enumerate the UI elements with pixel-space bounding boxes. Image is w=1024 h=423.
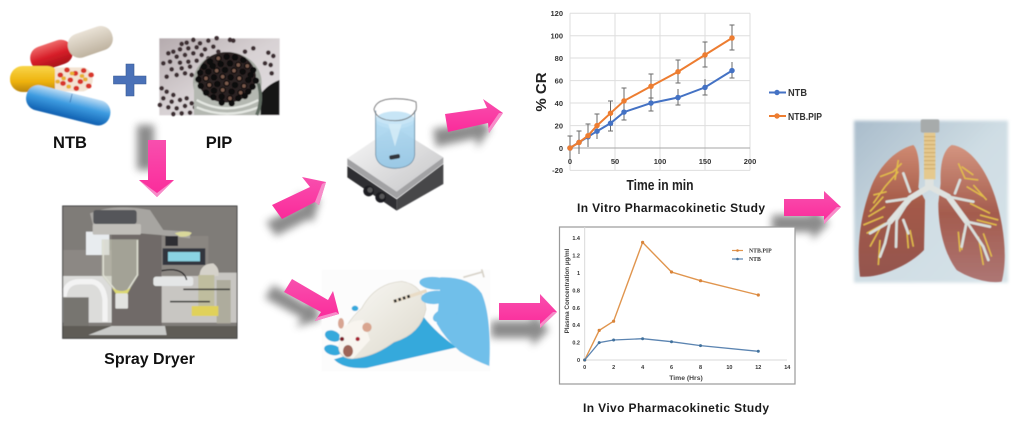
- arrow shadows: [137, 114, 829, 346]
- legend: NTB: [749, 257, 761, 263]
- mouse body: [338, 281, 426, 359]
- y axis ticks: 0.2: [572, 340, 580, 346]
- illustration: beaker on magnetic stirrer: [347, 99, 443, 211]
- yellow bronchioles: [863, 160, 998, 265]
- x axis ticks: 0: [568, 157, 572, 166]
- y axis ticks: 0: [559, 144, 563, 153]
- yellow capsule with granules: [10, 66, 93, 92]
- label: PIP: PIP: [206, 134, 232, 152]
- arrow: to in vitro chart: [445, 99, 503, 133]
- right lobe: [938, 145, 1005, 282]
- arrow: to dissolution beaker: [272, 177, 326, 219]
- blue capsule: [23, 83, 113, 128]
- x axis ticks: 200: [744, 157, 756, 166]
- y axis ticks: 60: [555, 76, 563, 86]
- series: NTB: [585, 339, 758, 360]
- white bronchi: [916, 179, 942, 187]
- caption: In Vitro Pharmacokinetic Study: In Vitro Pharmacokinetic Study: [577, 201, 765, 215]
- chart: in vivo plasma concentration versus time: [560, 227, 795, 384]
- y axis title: Plasma Concentration µg/ml: [564, 248, 571, 333]
- y axis ticks: 20: [555, 122, 563, 130]
- label: NTB: NTB: [53, 134, 87, 152]
- x axis title: Time in min: [626, 177, 694, 194]
- x axis ticks: 0: [583, 365, 586, 371]
- y axis title: % CR: [533, 72, 550, 112]
- x axis ticks: 100: [654, 157, 666, 166]
- y axis ticks: 80: [555, 54, 563, 63]
- legend: [732, 248, 772, 263]
- x axis ticks: 4: [641, 365, 645, 371]
- upper glove: [419, 276, 490, 366]
- illustration: lungs: [854, 119, 1008, 283]
- red and cream capsule: [27, 23, 116, 74]
- pink arrows: [139, 99, 841, 328]
- x axis title: Time (Hrs): [669, 375, 703, 382]
- y axis ticks: 1.2: [572, 254, 580, 260]
- series: NTB: [570, 71, 732, 148]
- photo: black pepper jar: [159, 38, 280, 115]
- syringe: [393, 269, 484, 302]
- stirrer base: [347, 127, 443, 211]
- beaker with water: [374, 99, 416, 168]
- arrow: to mouse: [284, 279, 339, 321]
- y axis ticks: 0.6: [572, 306, 580, 312]
- y axis ticks: 0.4: [572, 323, 581, 329]
- y axis ticks: -20: [552, 166, 563, 175]
- x axis ticks: 8: [699, 365, 702, 371]
- left lobe: [859, 145, 925, 277]
- y axis ticks: 40: [555, 99, 563, 108]
- axes: [585, 227, 787, 360]
- y axis ticks: 1.4: [572, 236, 581, 242]
- y axis ticks: 1: [577, 271, 580, 277]
- gridlines: [570, 13, 750, 170]
- legend: NTB.PIP: [749, 248, 772, 254]
- x axis ticks: 150: [699, 157, 711, 166]
- lower glove: [323, 306, 457, 368]
- legend: NTB.PIP: [788, 112, 822, 123]
- series: NTB.PIP: [570, 38, 732, 148]
- series: NTB.PIP: [585, 242, 758, 360]
- caption: In Vivo Pharmacokinetic Study: In Vivo Pharmacokinetic Study: [583, 401, 769, 415]
- y axis ticks: 0.8: [572, 288, 580, 294]
- y axis ticks: 120: [550, 9, 563, 18]
- trachea: [921, 119, 939, 179]
- x axis ticks: 10: [726, 365, 732, 371]
- y axis ticks: 100: [550, 32, 563, 40]
- y axis ticks: [550, 9, 563, 175]
- x axis ticks: 6: [670, 365, 673, 371]
- x axis ticks: 14: [784, 365, 791, 371]
- y axis ticks: 0: [577, 358, 580, 364]
- label: Spray Dryer: Spray Dryer: [104, 351, 195, 368]
- x axis ticks: [583, 365, 791, 371]
- arrow: to in vivo chart: [499, 294, 557, 328]
- arrow: to lungs: [784, 191, 841, 224]
- x axis ticks: 2: [612, 365, 615, 371]
- plus sign: [114, 64, 146, 96]
- legend: NTB: [788, 88, 807, 99]
- y axis ticks: [572, 236, 581, 364]
- background panel: [854, 121, 1008, 283]
- x axis ticks: 12: [755, 365, 761, 371]
- x axis ticks: 50: [611, 157, 619, 166]
- x axis ticks: [568, 157, 756, 166]
- illustration: mouse held in gloved hands with syringe: [322, 269, 490, 372]
- arrow: down to spray dryer: [139, 140, 174, 197]
- chart: in vitro % CR versus time: [533, 9, 822, 194]
- photo: spray dryer: [63, 206, 237, 338]
- error bars: [568, 25, 734, 160]
- legend: [769, 88, 822, 123]
- capsules: NTB: [10, 23, 116, 128]
